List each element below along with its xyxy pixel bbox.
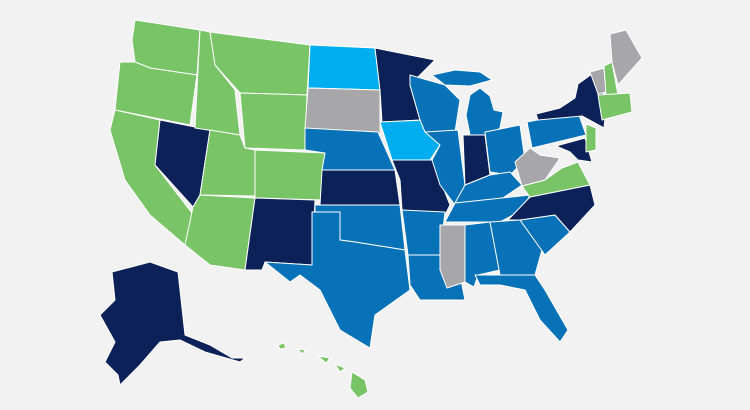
state: Virginia bbox=[522, 162, 590, 197]
state: South Carolina bbox=[520, 215, 570, 255]
state: West Virginia bbox=[515, 148, 560, 186]
state: Massachusetts / Connecticut / Rhode Island bbox=[598, 93, 632, 120]
state: North Carolina bbox=[508, 185, 595, 232]
state: Mississippi bbox=[440, 225, 465, 288]
state: New Mexico bbox=[245, 198, 315, 270]
state: Kentucky bbox=[455, 172, 522, 203]
state: Oklahoma bbox=[315, 205, 405, 250]
state: Minnesota bbox=[375, 48, 435, 122]
state: New Jersey bbox=[586, 124, 596, 152]
state: South Dakota bbox=[305, 88, 380, 135]
state: Iowa bbox=[380, 120, 440, 160]
state: Maine bbox=[610, 30, 642, 85]
state: Georgia bbox=[490, 220, 542, 275]
state: New Hampshire bbox=[604, 62, 618, 95]
state: Texas bbox=[265, 212, 410, 348]
state: Alabama bbox=[465, 222, 500, 287]
state: Tennessee bbox=[445, 195, 530, 222]
state: Hawaii bbox=[278, 343, 368, 398]
state: Nebraska bbox=[305, 128, 395, 170]
state: Indiana bbox=[463, 135, 490, 185]
state: Michigan bbox=[466, 88, 503, 135]
state: Kansas bbox=[320, 170, 400, 205]
state: Maryland / Delaware bbox=[556, 138, 592, 162]
state: Oregon bbox=[115, 62, 197, 125]
state: Arkansas bbox=[402, 210, 445, 255]
state: Alaska bbox=[100, 262, 245, 385]
state: Missouri bbox=[392, 160, 450, 215]
state: Colorado bbox=[255, 150, 325, 200]
state: California bbox=[110, 110, 205, 245]
state: North Dakota bbox=[308, 45, 380, 90]
state: Idaho bbox=[195, 30, 240, 135]
state: Pennsylvania bbox=[527, 112, 586, 148]
state: Wisconsin bbox=[410, 75, 460, 132]
state: Montana bbox=[210, 32, 310, 95]
state: Washington bbox=[132, 20, 200, 75]
state: Wyoming bbox=[240, 93, 307, 150]
state: Florida bbox=[475, 275, 568, 342]
state: Illinois bbox=[425, 130, 465, 205]
state: Nevada bbox=[155, 120, 210, 207]
state: Arizona bbox=[185, 195, 255, 270]
state: Louisiana bbox=[408, 255, 465, 300]
state: Utah bbox=[200, 130, 255, 196]
state: Ohio bbox=[485, 125, 525, 175]
state: New York bbox=[536, 74, 606, 128]
state: Vermont bbox=[590, 68, 606, 94]
state: Michigan upper peninsula bbox=[432, 70, 492, 86]
